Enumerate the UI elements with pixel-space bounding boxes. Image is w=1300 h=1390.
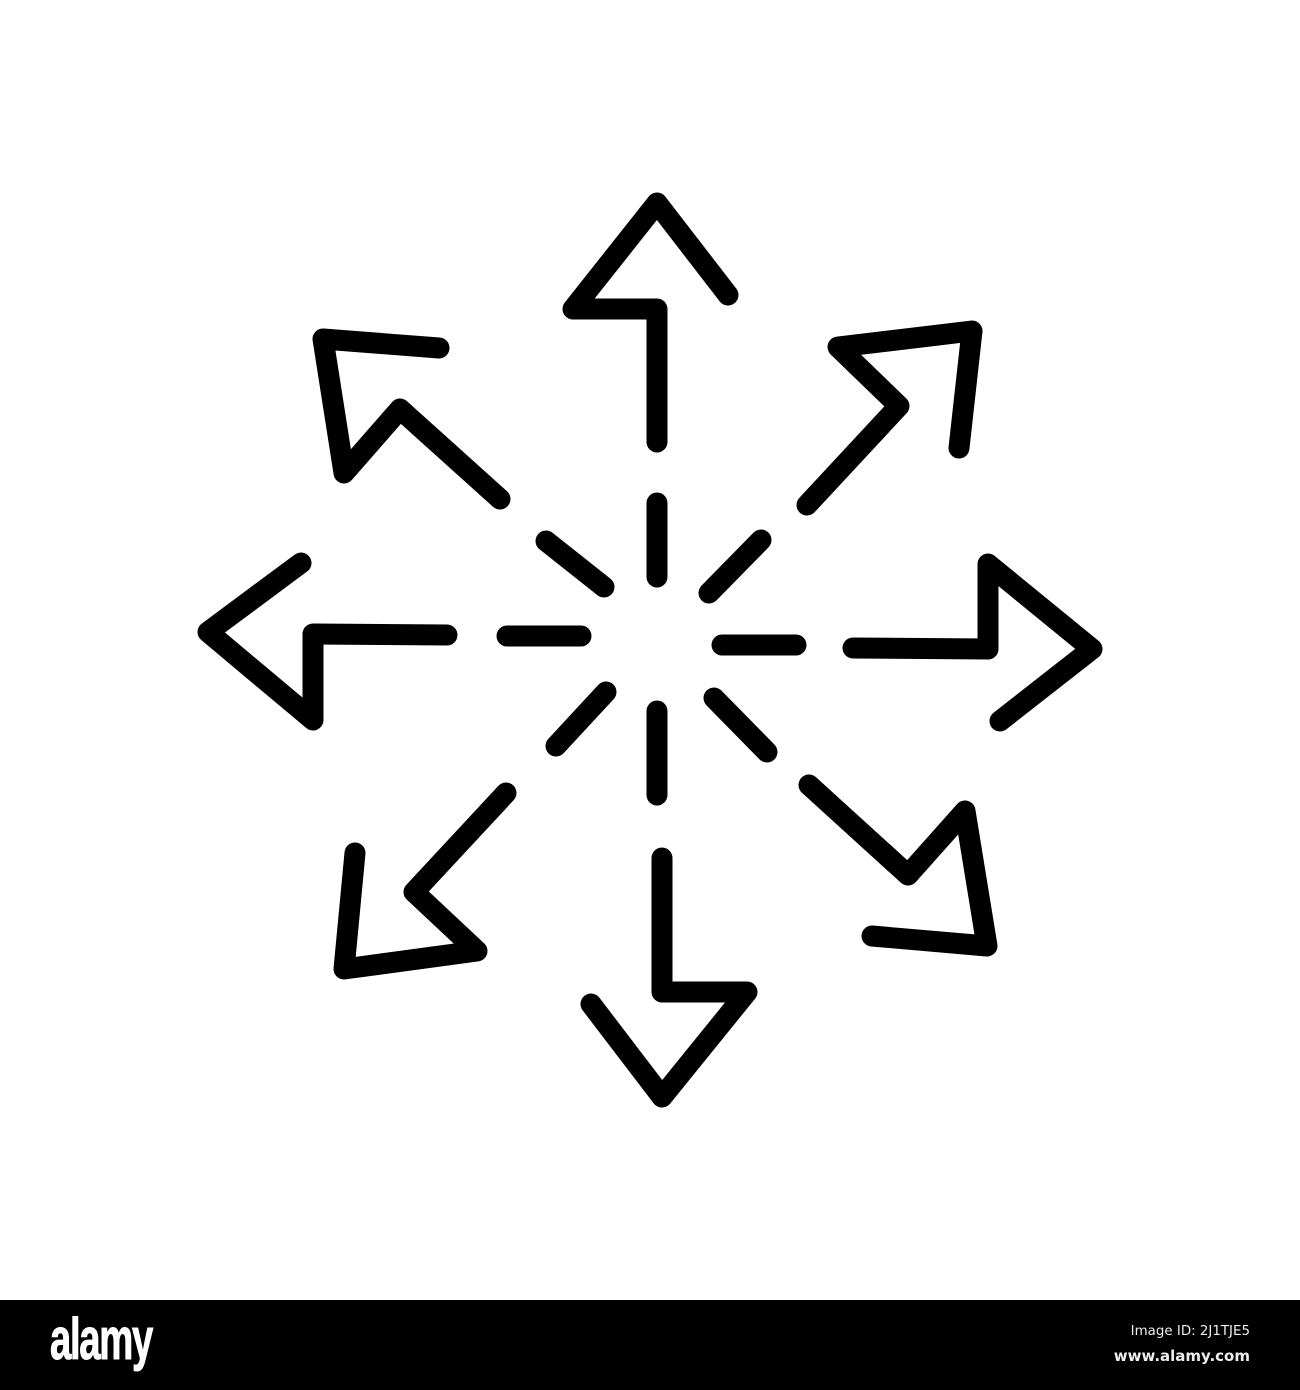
arrow: up-right <box>709 331 972 593</box>
arrow: down <box>591 711 747 1097</box>
arrow: up <box>573 203 728 577</box>
logo: alamy: alamy <box>50 1307 152 1372</box>
arrow: right <box>722 564 1092 721</box>
arrow: down-left <box>344 692 606 969</box>
arrow: left <box>208 563 581 720</box>
arrow: down-right <box>714 698 987 946</box>
image id: Image ID: 2J1TJE5 <box>1131 1324 1250 1339</box>
footer bar <box>0 1300 1300 1390</box>
website: www.alamy.com <box>1114 1347 1250 1365</box>
arrow: up-left <box>323 339 604 587</box>
